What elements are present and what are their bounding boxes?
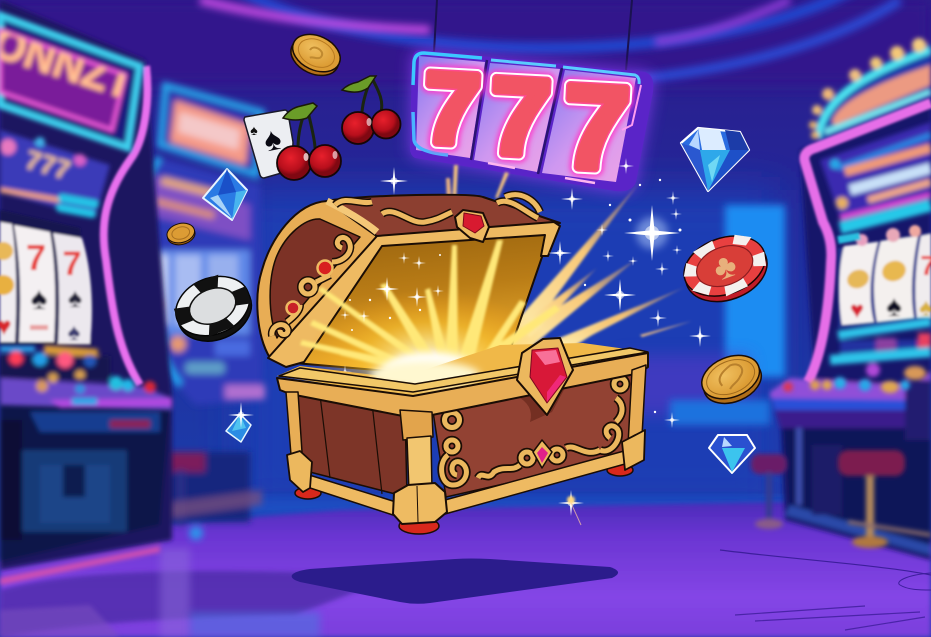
reels: [838, 225, 931, 328]
corner blocks: [287, 451, 312, 492]
reels: [0, 210, 92, 346]
neon sevens: 7: [421, 52, 482, 166]
neon sevens: 7: [560, 60, 632, 196]
game screen: [0, 130, 110, 218]
machine cabinet: [0, 0, 172, 585]
lid top surface: [327, 195, 560, 237]
right face ornaments: [442, 378, 626, 485]
lower panels and buttons: [783, 322, 931, 393]
sparkles around the chest: [380, 158, 711, 525]
sign glow: [410, 50, 653, 191]
icon: cherries right: [342, 76, 400, 144]
neon sevens: 7: [487, 55, 553, 179]
neon 777 sign: [410, 0, 653, 196]
reels: ♥: [850, 297, 864, 324]
lid ornaments: [272, 195, 540, 336]
marquee with bulbs: [809, 38, 931, 142]
front gem: [517, 338, 573, 415]
bottom rails: [304, 474, 396, 516]
icon: playing card: [244, 110, 293, 178]
pink neon side trim: [104, 66, 147, 385]
icon: playing card: ♠: [250, 122, 258, 138]
icon: gold coin right: [695, 347, 768, 411]
posts: [286, 392, 302, 455]
cabinet: [770, 100, 931, 560]
lid dome end: [257, 201, 378, 362]
icon: small sparkling diamond: [226, 402, 254, 442]
floor shadow of chest: [292, 558, 618, 604]
neon sevens: 7: [560, 60, 632, 196]
reels: ♠: [886, 290, 902, 323]
bar stools, right: [751, 450, 931, 548]
icon: small coin left: [165, 220, 197, 248]
neon sevens: 7: [487, 55, 553, 179]
chest base: [277, 338, 648, 524]
icon: cherries left: [277, 103, 341, 180]
sparks inside the chest: [338, 252, 444, 379]
icon: playing card: ♠: [260, 120, 284, 158]
icon: diamond lower right: [709, 435, 755, 473]
slot machine: right: [770, 38, 931, 560]
icon: black chip: [167, 266, 261, 352]
game screen: 777: [22, 145, 74, 186]
lid gem: [455, 210, 489, 242]
feet: [295, 487, 321, 499]
rim band front: [277, 353, 648, 418]
chest: [257, 195, 648, 534]
icon: red chip: ♣: [708, 245, 742, 289]
neon edge tubes: [413, 53, 482, 85]
neon sevens: 7: [421, 52, 482, 166]
floor: [0, 502, 931, 637]
gold rays escaping to the right and up: [446, 165, 692, 362]
neon sevens: 7: [487, 55, 553, 179]
neon sevens: 7: [560, 60, 632, 196]
neon sevens: 7: [421, 52, 482, 166]
right face: [432, 368, 634, 497]
pink neon frame: [804, 103, 931, 382]
reels: 7: [63, 245, 81, 283]
neon sevens: 7: [421, 52, 482, 166]
lid: [257, 195, 560, 372]
reels: ♠: [68, 319, 81, 346]
buttons panel: [0, 345, 172, 410]
icon: gold coin top: [285, 27, 346, 83]
reels: 7: [26, 237, 46, 278]
left face: [290, 388, 407, 497]
icon: diamond left: [203, 169, 247, 220]
neon sevens: [421, 52, 632, 196]
slot machine: left: [0, 0, 172, 585]
lid frame: [268, 222, 560, 367]
game screen: [820, 122, 931, 228]
neon sevens: 7: [560, 60, 632, 196]
sign backing panels: [410, 50, 653, 191]
reels: ♠: [30, 280, 48, 316]
neon sevens: 7: [487, 55, 553, 179]
icon: red chip: [676, 225, 776, 312]
reels: ♠: [68, 283, 82, 313]
inner glow and burst: [300, 240, 560, 430]
rim top back: [277, 343, 648, 397]
lid inner face: [283, 228, 552, 372]
slot machine: middle left, blurred: [135, 85, 265, 540]
icon: diamond top right: [681, 128, 749, 191]
